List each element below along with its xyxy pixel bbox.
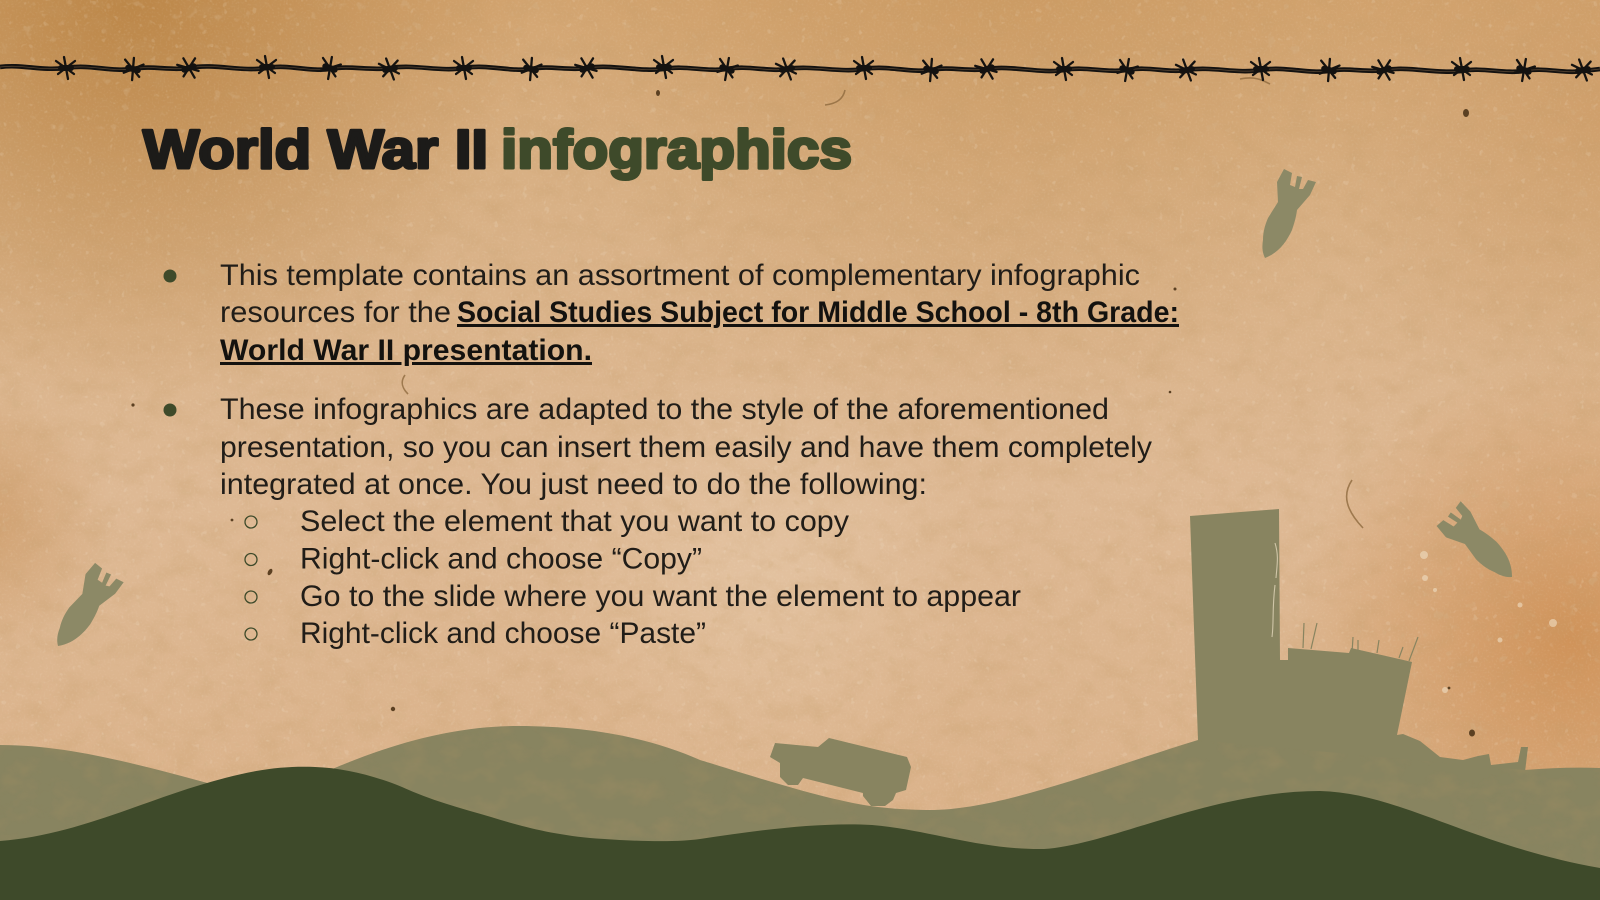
bullet text: first paragraph: Social Studies Subject for Middle School - 8th Grade: [457,296,1179,329]
jeep silhouette [770,738,911,806]
ruined buildings [1190,509,1528,800]
bullet text: second paragraph [164,393,1152,501]
bullet marker [164,270,176,282]
barbed wire [0,54,1600,84]
title [143,118,852,180]
bullet text: second paragraph: integrated at once. You just need to do the following: [220,468,927,501]
bullet text: first paragraph [164,259,1179,367]
bullet text: first paragraph: resources for the [220,296,451,329]
title: infographics [501,118,852,180]
icon: falling bomb right [1429,496,1531,579]
back hills [0,726,1600,868]
step 4: Right-click and choose “Paste” [300,617,706,650]
bullet text: first paragraph: World War II presentation. [220,334,592,367]
bullet text: first paragraph: This template contains an assortment of complementary infographic [220,259,1140,292]
bullet marker [164,404,176,416]
step 3: Go to the slide where you want the element to appear [300,580,1021,613]
bullet text: second paragraph: These infographics are adapted to the style of the aforementioned [220,393,1109,426]
sub-list of steps [245,505,1021,650]
step 1: Select the element that you want to copy [300,505,849,538]
foreground hill [0,767,1600,900]
icon: falling bomb top right [1262,169,1316,258]
step 2: Right-click and choose “Copy” [300,542,702,576]
title: World War II [143,118,488,180]
bullet text: second paragraph: presentation, so you can insert them easily and have them completely [220,431,1152,464]
icon: falling bomb left [55,558,126,657]
